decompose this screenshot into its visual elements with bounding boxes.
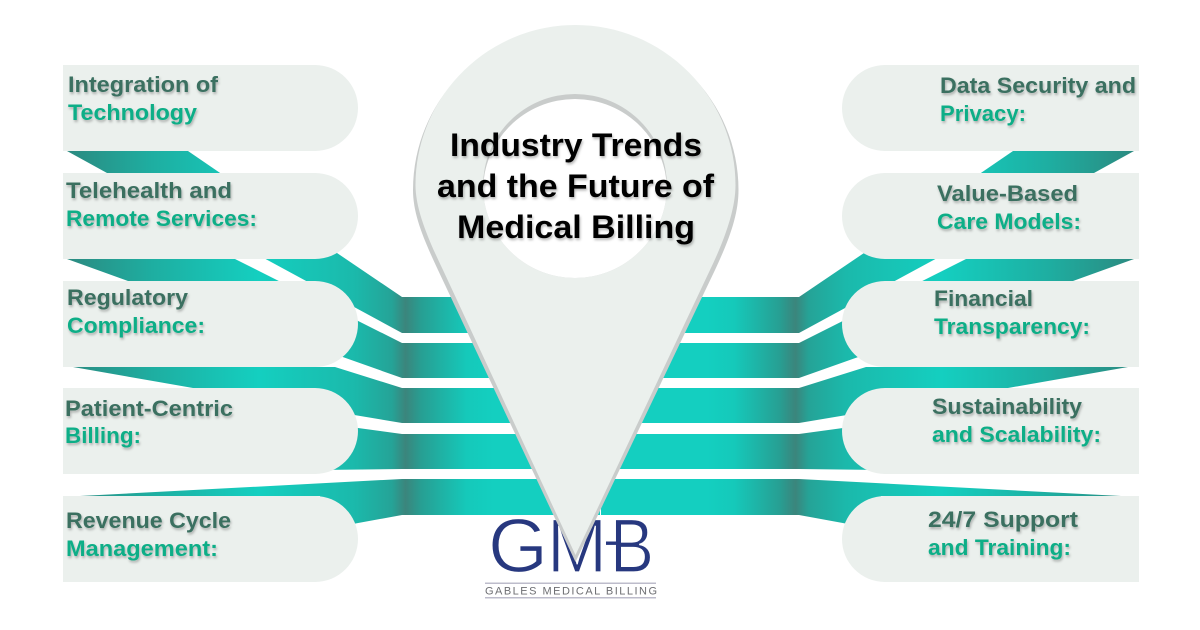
label: Regulatory Compliance: Compliance:	[67, 313, 205, 338]
label: Patient-Centric Billing: Billing:	[65, 423, 141, 448]
label: Sustainability and Scalability	[932, 394, 1101, 447]
label: Data Security and Privacy: Privacy:	[940, 101, 1026, 126]
title: Medical Billing	[457, 209, 695, 245]
label: Value-Based Care Models: Care Models:	[937, 209, 1081, 234]
label: Value-Based Care Models	[937, 181, 1081, 234]
label: Data Security and Privacy: Data Security and	[940, 73, 1136, 98]
title: and the Future of	[437, 168, 714, 204]
label: Patient-Centric Billing: Patient-Centric	[65, 396, 233, 421]
label: Integration of Technology: Technology	[68, 100, 198, 125]
label: Value-Based Care Models: Value-Based	[937, 181, 1078, 206]
logo: Gables Medical Billing: B	[610, 504, 654, 589]
label: 24/7 Support and Training	[928, 507, 1079, 560]
label: Regulatory Compliance: Regulatory	[67, 285, 189, 310]
label: Sustainability and Scalability: and Scalability:	[932, 422, 1101, 447]
right label panels	[842, 65, 1139, 582]
label: Revenue Cycle Management: Revenue Cycle	[66, 508, 231, 533]
ribbons: left side	[67, 151, 600, 530]
label: Financial Transparency: Transparency:	[934, 314, 1090, 339]
ribbons: right side	[601, 151, 1134, 530]
left label panels	[63, 65, 358, 582]
label: Telehealth and Remote Services	[66, 178, 257, 231]
label: 24/7 Support and Training: and Training:	[928, 535, 1071, 560]
label: Telehealth and Remote Services: Telehealth and	[66, 178, 232, 203]
label: Revenue Cycle Management	[66, 508, 231, 561]
label: Integration of Technology: Integration of	[68, 72, 219, 97]
label: Patient-Centric Billing	[65, 396, 233, 448]
logo: Gables Medical Billing	[485, 504, 657, 598]
label: Financial Transparency	[934, 286, 1090, 339]
title	[437, 127, 714, 245]
title: Industry Trends	[450, 127, 702, 163]
logo: Gables Medical Billing: G	[488, 504, 548, 589]
label: Data Security and Privacy	[940, 73, 1136, 126]
label: Revenue Cycle Management: Management:	[66, 536, 218, 561]
logo: Gables Medical Billing: GABLES MEDICAL BILLING	[485, 586, 657, 598]
label: Integration of Technology	[68, 72, 219, 125]
location pin	[413, 25, 738, 562]
label: Telehealth and Remote Services: Remote Services:	[66, 206, 257, 231]
logo: Gables Medical Billing: M	[547, 504, 607, 589]
label: Sustainability and Scalability: Sustainability	[932, 394, 1083, 419]
label: Regulatory Compliance	[67, 285, 205, 338]
label: Financial Transparency: Financial	[934, 286, 1033, 311]
label: 24/7 Support and Training: 24/7 Support	[928, 507, 1079, 532]
